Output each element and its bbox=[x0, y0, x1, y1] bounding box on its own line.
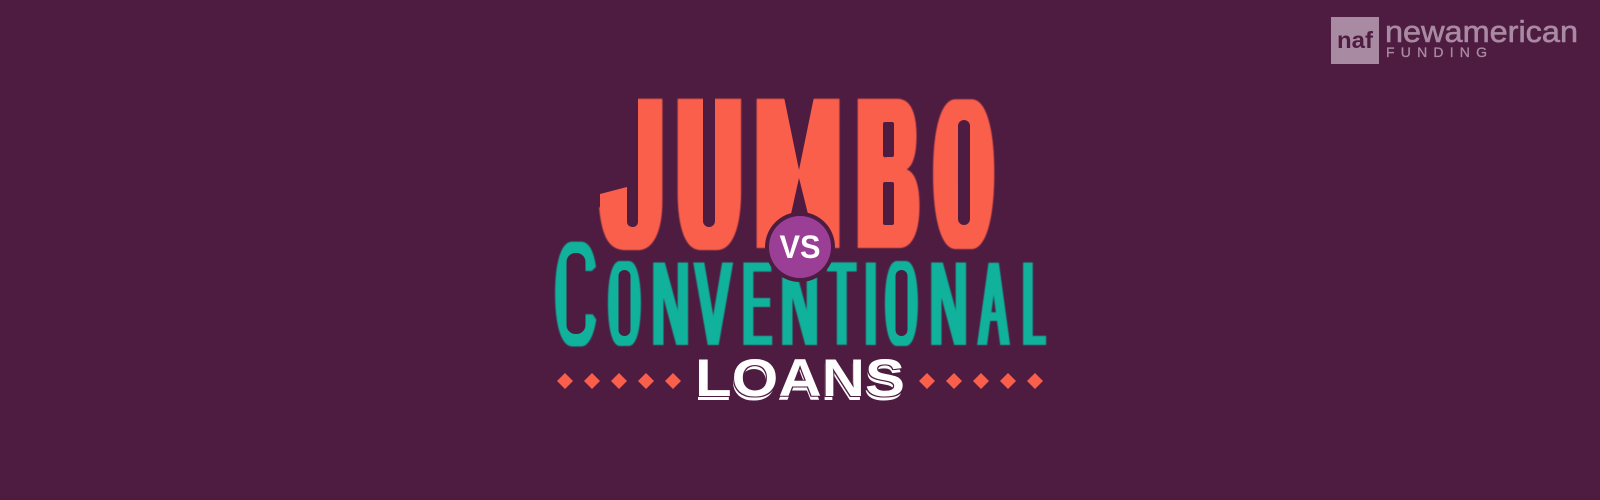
logo wordmark: newamerican bbox=[1385, 14, 1578, 49]
title: CONVENTIONAL: I bbox=[865, 238, 877, 372]
CONVENTIONAL letter counters bbox=[566, 253, 908, 336]
title: CONVENTIONAL: A bbox=[980, 237, 1007, 370]
title: JUMBO bbox=[604, 51, 989, 295]
title: CONVENTIONAL: O bbox=[611, 236, 638, 371]
title: LOANS: LOANS bbox=[695, 349, 905, 408]
title: CONVENTIONAL: N bbox=[652, 236, 689, 371]
logo square bbox=[1331, 17, 1379, 64]
logo initials: naf bbox=[1337, 27, 1373, 53]
title: JUMBO: U bbox=[681, 51, 738, 295]
title: JUMBO: J bbox=[604, 52, 663, 295]
title: CONVENTIONAL bbox=[557, 213, 1044, 377]
logo subtitle: FUNDING bbox=[1386, 44, 1487, 60]
title: CONVENTIONAL: O bbox=[888, 236, 915, 371]
J hook top bbox=[600, 187, 627, 210]
JUMBO letter counters bbox=[610, 90, 970, 250]
logo: New American Funding bbox=[1331, 14, 1578, 64]
vs badge: VS bbox=[780, 229, 820, 265]
left diamonds bbox=[557, 373, 681, 389]
title: CONVENTIONAL: N bbox=[930, 236, 967, 371]
title: JUMBO: O bbox=[938, 56, 989, 293]
title: CONVENTIONAL: C bbox=[557, 213, 594, 377]
title: CONVENTIONAL: N bbox=[781, 236, 818, 371]
title: JUMBO: M bbox=[756, 51, 840, 294]
right diamonds bbox=[919, 373, 1043, 389]
title: CONVENTIONAL: E bbox=[743, 238, 771, 372]
title: JUMBO: B bbox=[861, 53, 915, 295]
vs badge bbox=[765, 212, 835, 282]
title: CONVENTIONAL: T bbox=[829, 238, 855, 372]
title: CONVENTIONAL: L bbox=[1023, 236, 1044, 371]
title: CONVENTIONAL: V bbox=[696, 236, 731, 371]
